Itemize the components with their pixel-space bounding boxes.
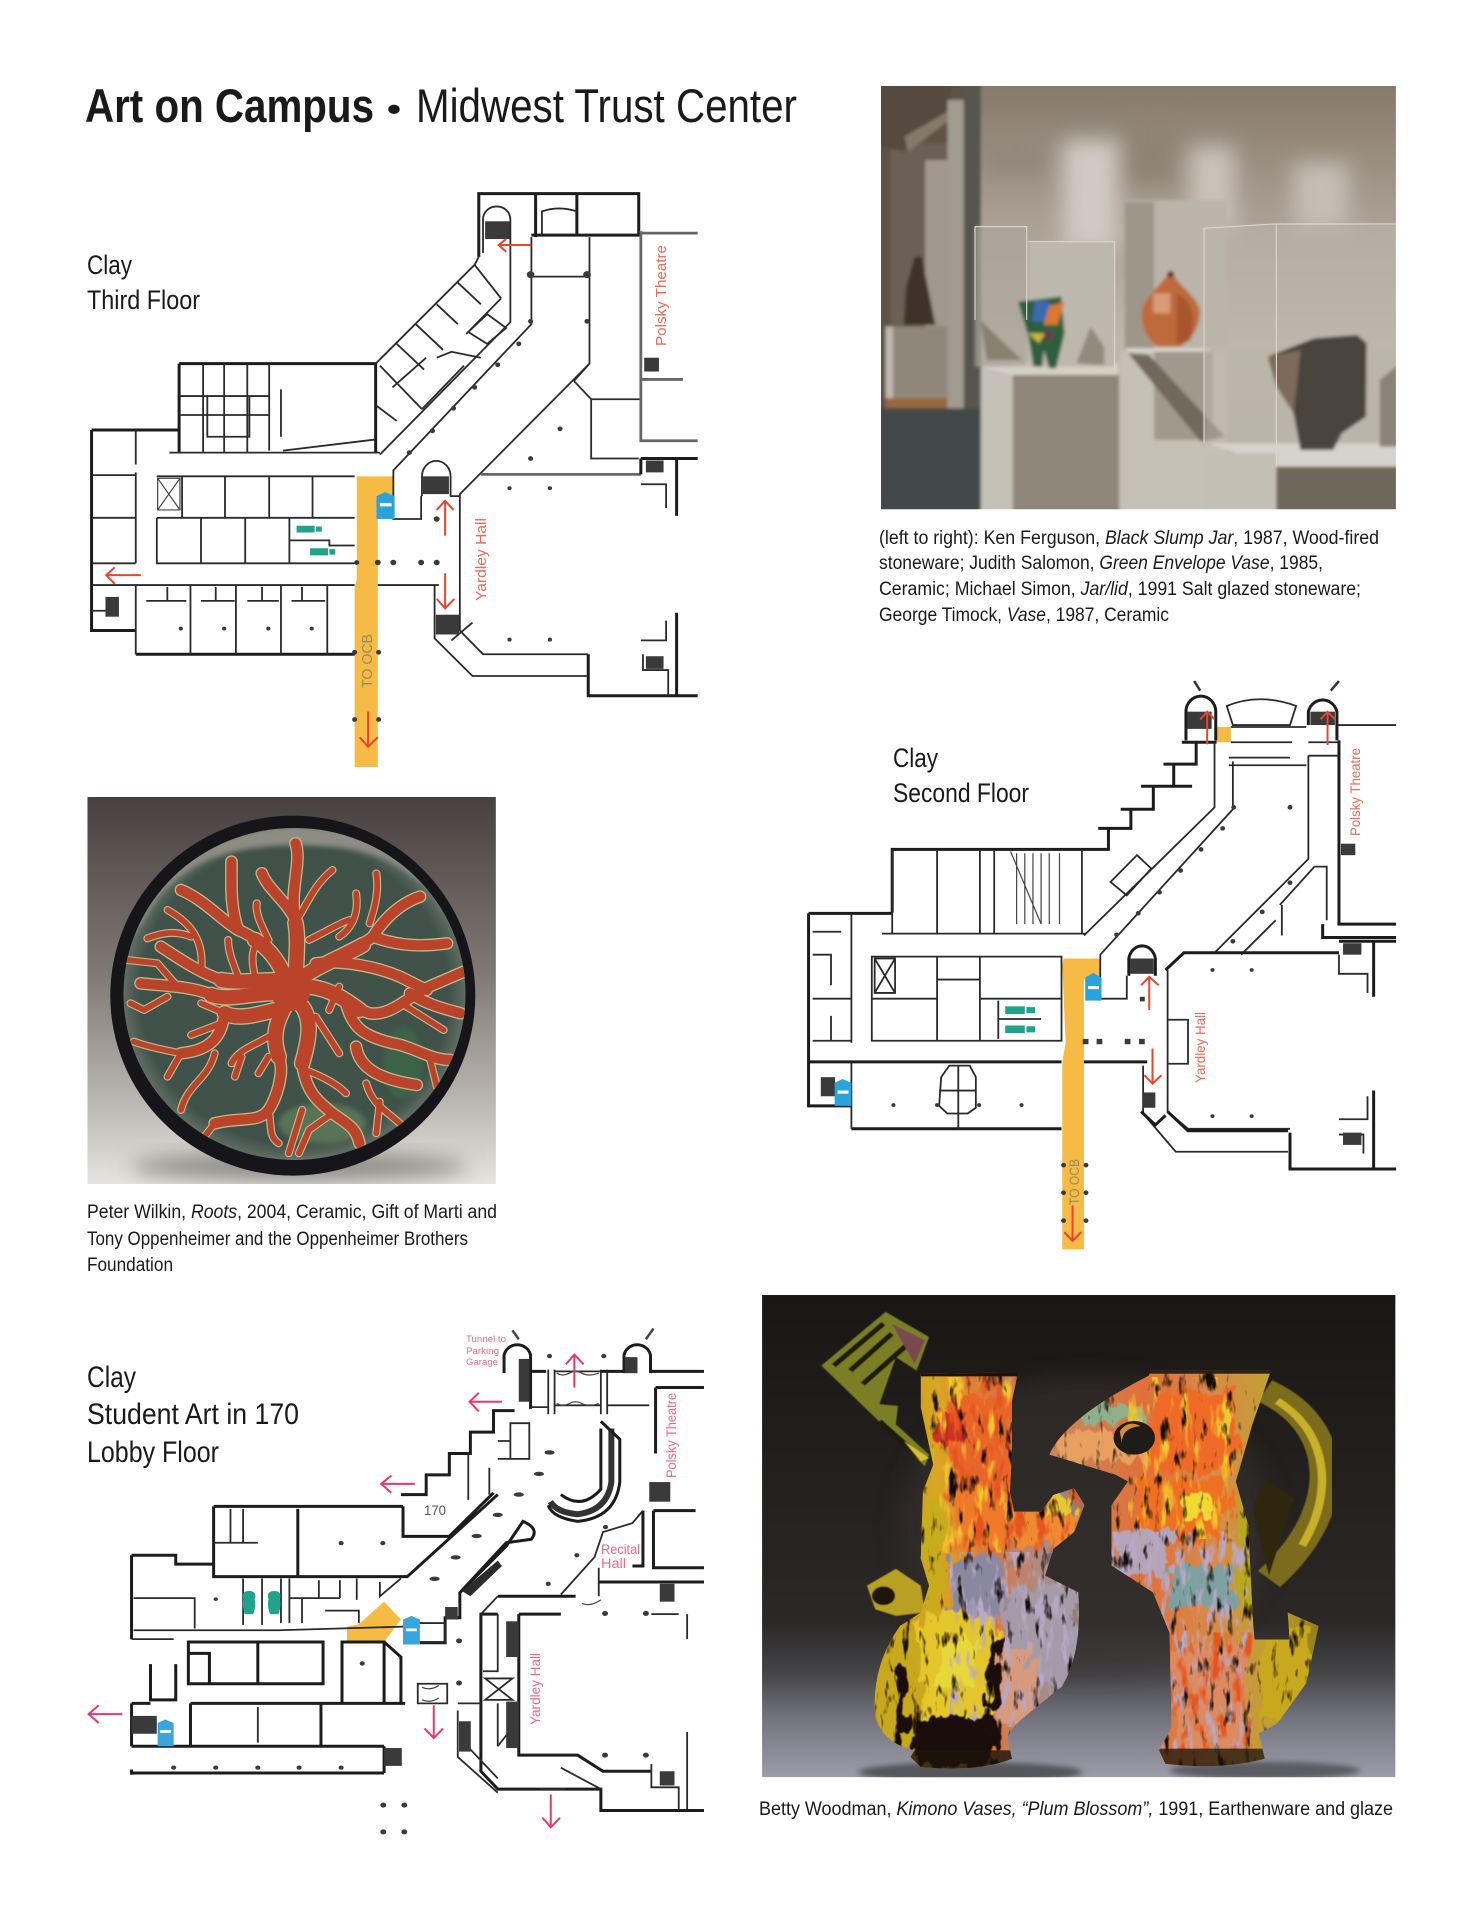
caption: gallery photo: George Timock, Vase, 1987, Ceramic [879, 605, 1169, 626]
panel: third floor label: Third Floor [87, 285, 200, 315]
caption: Roots plate: Peter Wilkin, Roots, 2004, Ceramic, Gift of Marti and [87, 1202, 497, 1223]
floor plan: lobby floor: Parking [466, 1346, 499, 1356]
photo: Kimono Vases [762, 1295, 1395, 1782]
middle pedestal [1130, 199, 1225, 286]
caption: gallery photo: (left to right): Ken Ferguson, Black Slump Jar, 1987, Wood-fired [879, 528, 1379, 549]
panel: second floor label [893, 743, 1029, 808]
panel: lobby floor label: Clay [87, 1361, 136, 1394]
floor plan: third floor: Yardley Hall [473, 518, 490, 601]
photo: Roots plate [87, 797, 500, 1184]
wall [978, 86, 1396, 509]
title: Midwest Trust Center [416, 79, 797, 132]
orange pot [1142, 273, 1200, 347]
dark vessel [1268, 335, 1367, 450]
floor plan: lobby floor: Polsky Theatre [663, 1393, 679, 1478]
caption: Roots plate: Tony Oppenheimer and the Oppenheimer Brothers [87, 1229, 468, 1250]
title [85, 79, 797, 132]
floor plan: lobby floor: Garage [466, 1357, 498, 1367]
floor plan: third floor: TO OCB [359, 634, 376, 688]
right vase [1252, 1391, 1325, 1579]
center pedestal [981, 367, 1014, 513]
floor plan: second floor: Polsky Theatre [1347, 748, 1363, 836]
panel: second floor label: Clay [893, 743, 938, 773]
caption: Roots plate: Foundation [87, 1255, 173, 1276]
title: • [387, 91, 401, 127]
panel: lobby floor label: Student Art in 170 [87, 1398, 299, 1431]
floor plan: lobby floor: Recital [601, 1541, 640, 1557]
photo: gallery display cases [870, 80, 1411, 515]
panel: third floor label [87, 250, 200, 315]
caption: gallery photo: stoneware; Judith Salomon, Green Envelope Vase, 1985, [879, 553, 1323, 574]
floor plan: lobby floor [89, 1329, 704, 1834]
right pedestal and case [1204, 225, 1411, 445]
floor plan: lobby floor: Hall [601, 1555, 626, 1571]
floor plan: second floor: Yardley Hall [1192, 1012, 1208, 1083]
left vase [821, 1312, 929, 1616]
floor plan: lobby floor: Yardley Hall [527, 1653, 543, 1725]
title: Art on Campus [85, 79, 374, 132]
caption: gallery photo: Ceramic; Michael Simon, Jar/lid, 1991 Salt glazed stoneware; [879, 579, 1361, 600]
floor plan: second floor [809, 681, 1396, 1249]
floor plan: second floor: TO OCB [1066, 1159, 1082, 1205]
caption: Kimono Vases: Betty Woodman, Kimono Vases, “Plum Blossom”, 1991, Earthenware and glaze [759, 1799, 1393, 1820]
panel: lobby floor label: Lobby Floor [87, 1436, 219, 1469]
floor plan: lobby floor: Tunnel to [466, 1334, 506, 1344]
caption: Roots plate [87, 1202, 497, 1276]
floor plan: third floor: Polsky Theatre [653, 245, 670, 346]
panel: second floor label: Second Floor [893, 778, 1029, 808]
panel: lobby floor label [87, 1361, 299, 1469]
green sculpture [1018, 297, 1065, 368]
floor plan: lobby floor: 170 [424, 1502, 446, 1518]
caption: gallery photo [879, 528, 1379, 626]
floor plan: third floor [92, 194, 698, 767]
panel: third floor label: Clay [87, 250, 132, 280]
